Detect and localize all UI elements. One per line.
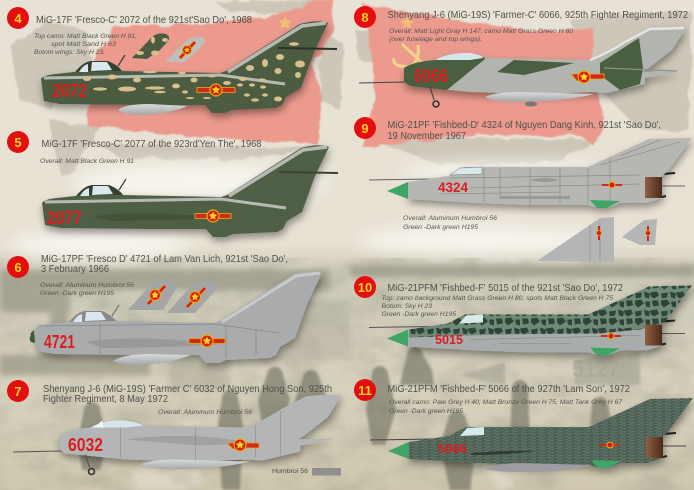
badge 8: 8 xyxy=(361,10,369,25)
badge 8 xyxy=(354,6,376,28)
heading 5: MiG-17F 'Fresco-C' 2077 of the 923rd'Yen The', 1968 xyxy=(42,138,262,150)
badge 4: 4 xyxy=(14,11,22,26)
notes 4: Botom wings: Sky H 23. xyxy=(34,49,105,56)
fin detail large xyxy=(537,217,614,262)
badge 9: 9 xyxy=(361,121,369,136)
number 2077: 2077 xyxy=(47,208,82,228)
badge 11: 11 xyxy=(358,383,372,398)
notes 9: Overall: Aluminum Humbrol 56 xyxy=(403,215,497,222)
notes 6: Overall: Aluminum Humbrol 56 xyxy=(40,282,134,289)
heading 7 xyxy=(43,383,332,405)
notes 10: Green -Dark green H195 xyxy=(382,311,456,318)
fin detail small xyxy=(622,219,657,245)
heading 10: MiG-21PFM 'Fishbed-F' 5015 of the 921st 'Sao Do', 1972 xyxy=(388,282,623,294)
aircraft 10: MiG-21PFM camouflaged xyxy=(369,278,694,356)
notes 6 xyxy=(40,282,134,297)
wing underside with roundel xyxy=(165,37,205,62)
aircraft 7: J-6 aluminium xyxy=(13,395,342,474)
aircraft 8: J-6 camouflaged xyxy=(359,27,686,107)
number 5066: 5066 xyxy=(438,441,467,456)
aircraft 6: MiG-17PF aluminium xyxy=(30,271,322,365)
notes 9: Green -Dark green H195 xyxy=(403,224,478,231)
badge 10: 10 xyxy=(358,280,372,295)
colour swatch Humbrol 56 xyxy=(272,468,341,476)
roundel xyxy=(227,439,259,451)
notes 5: Overall: Matt Black Green H 91 xyxy=(40,158,134,165)
notes 8: (over fuselage and top wings). xyxy=(389,36,482,43)
notes 4: spot Matt Sand H 63 xyxy=(51,41,116,48)
heading 7: Fighter Regiment, 8 May 1972 xyxy=(43,393,168,405)
badge 9 xyxy=(354,117,376,139)
badge 7: 7 xyxy=(14,384,22,399)
heading 9: 19 November 1967 xyxy=(388,130,466,142)
number 6066: 6066 xyxy=(414,66,448,86)
heading 11: MiG-21PFM 'Fishbed-F' 5066 of the 927th 'Lam Son', 1972 xyxy=(388,383,630,395)
badge 7 xyxy=(7,380,29,402)
ghost photo soldiers xyxy=(78,347,612,490)
red flag right with hammer and sickle xyxy=(362,3,604,147)
aircraft 11: MiG-21PFM green xyxy=(370,398,693,472)
notes 8: Overall: Matt Light Gray H 147, camo Matt Grass Green H 80 xyxy=(389,28,573,35)
badge 4 xyxy=(7,7,29,29)
roundel xyxy=(602,182,622,188)
notes 10: Botom: Sky H 23 xyxy=(382,303,432,310)
notes 10 xyxy=(382,295,613,318)
number 4721: 4721 xyxy=(44,332,75,352)
badge 11 xyxy=(354,379,376,401)
heading 9: MiG-21PF 'Fishbed-D' 4324 of Nguyen Dang Kinh, 921st 'Sao Do', xyxy=(388,119,661,131)
ghost photo tail number: 5127 xyxy=(572,356,620,383)
roundel xyxy=(601,333,621,339)
heading 9 xyxy=(388,119,661,142)
notes 11: Overall camo: Pale Grey H 40, Matt Bronze Green H 75, Matt Tank Grey H 67 xyxy=(389,399,622,406)
roundel xyxy=(189,335,225,347)
red flag left with star xyxy=(87,0,333,145)
notes 11: Green -Dark green H195 xyxy=(389,408,463,415)
heading 6: MiG-17PF 'Fresco D' 4721 of Lam Van Lich, 921st 'Sao Do', xyxy=(41,253,288,265)
number 5015: 5015 xyxy=(435,332,463,347)
badge 10 xyxy=(354,276,376,298)
colour swatch Humbrol 56: Humbrol 56 xyxy=(272,468,308,475)
roundel xyxy=(571,71,604,83)
roundel xyxy=(195,210,231,222)
notes 11 xyxy=(389,399,622,415)
heading 4: MiG-17F 'Fresco-C' 2072 of the 921st'Sao Do', 1968 xyxy=(36,14,252,26)
aircraft 9: MiG-21PF aluminium xyxy=(369,138,692,208)
notes 8 xyxy=(389,28,573,43)
notes 7: Overall: Aluminum Humbrol 56 xyxy=(158,409,252,416)
wing top view camo xyxy=(132,33,169,59)
number 2072: 2072 xyxy=(52,81,87,101)
aircraft 4: MiG-17F camouflaged xyxy=(41,21,337,115)
notes 9 xyxy=(403,215,497,231)
notes 4: Top camo: Matt Black Green H 91, xyxy=(34,33,137,40)
number 6032: 6032 xyxy=(68,435,103,455)
badge 6 xyxy=(7,256,29,278)
heading 6: 3 February 1966 xyxy=(41,263,109,275)
heading 6 xyxy=(41,253,288,275)
roundel xyxy=(197,84,235,96)
notes 6: Green -Dark green H195 xyxy=(40,290,114,297)
notes 10: Top: camo background Matt Grass Green H 80, spots Matt Black Green H 75 xyxy=(382,295,613,302)
badge 6: 6 xyxy=(14,260,22,275)
notes 4 xyxy=(34,33,137,56)
heading 7: Shenyang J-6 (MiG-19S) 'Farmer C' 6032 of Nguyen Hong Son, 925th xyxy=(43,383,332,395)
roundel xyxy=(600,442,620,448)
badge 5: 5 xyxy=(14,135,22,150)
badge 5 xyxy=(7,131,29,153)
number 4324: 4324 xyxy=(438,179,468,195)
wing undersides with roundels xyxy=(128,279,216,313)
aircraft 5: MiG-17F green xyxy=(42,145,338,237)
